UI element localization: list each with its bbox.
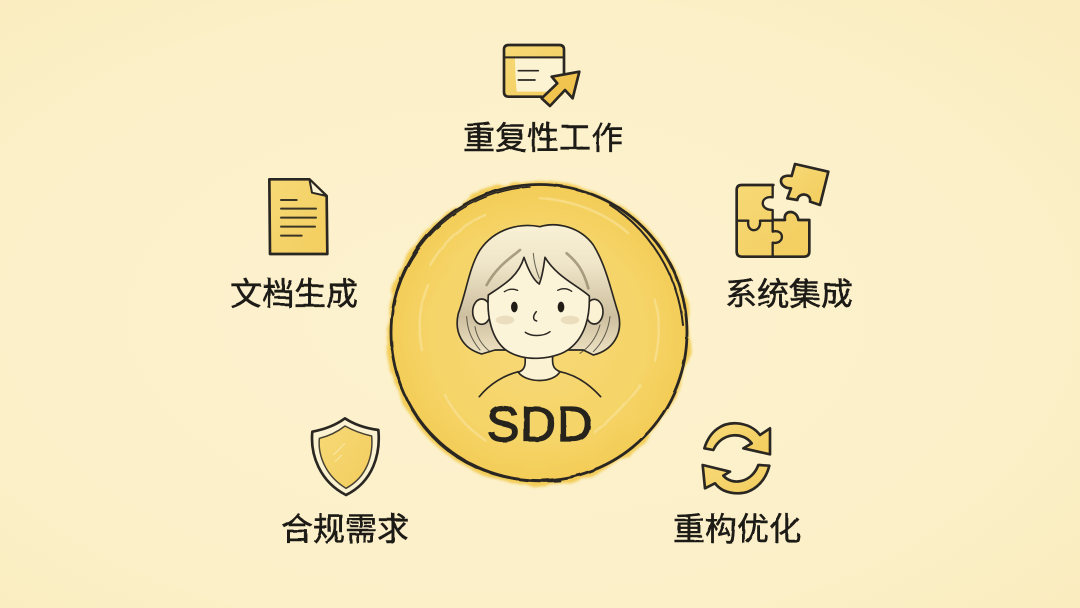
label: 合规需求 bbox=[281, 511, 409, 547]
brush streaks bbox=[420, 198, 659, 440]
hair bbox=[457, 225, 620, 355]
item: system integration bbox=[725, 164, 853, 312]
item: repetitive work bbox=[463, 45, 623, 156]
neck bbox=[518, 357, 560, 380]
label: 重构优化 bbox=[673, 511, 801, 547]
cheeks bbox=[496, 316, 579, 324]
mouth bbox=[525, 332, 550, 336]
icon: document bbox=[269, 179, 327, 254]
left ear bbox=[473, 299, 491, 324]
label: 重复性工作 bbox=[463, 120, 623, 156]
face bbox=[488, 257, 589, 358]
eyebrows bbox=[504, 289, 572, 292]
label: 系统集成 bbox=[725, 276, 853, 312]
icon: cycle arrows bbox=[703, 423, 770, 493]
item: compliance bbox=[281, 418, 409, 547]
central badge: girl avatar with SDD bbox=[386, 181, 690, 485]
nose bbox=[534, 312, 537, 321]
hair strands bbox=[467, 250, 610, 353]
label: 文档生成 bbox=[230, 276, 358, 312]
icon: shield bbox=[312, 418, 379, 495]
icon: window with arrow bbox=[504, 45, 579, 106]
icon: puzzle bbox=[737, 164, 828, 257]
item: document generation bbox=[230, 179, 358, 312]
outer ring sketch lines bbox=[391, 184, 687, 481]
SDD label: SDD bbox=[487, 398, 593, 452]
yellow disc bbox=[386, 181, 690, 485]
right ear bbox=[586, 299, 603, 324]
shirt bbox=[479, 372, 601, 397]
item: refactoring bbox=[673, 423, 801, 547]
eyes bbox=[511, 302, 518, 312]
